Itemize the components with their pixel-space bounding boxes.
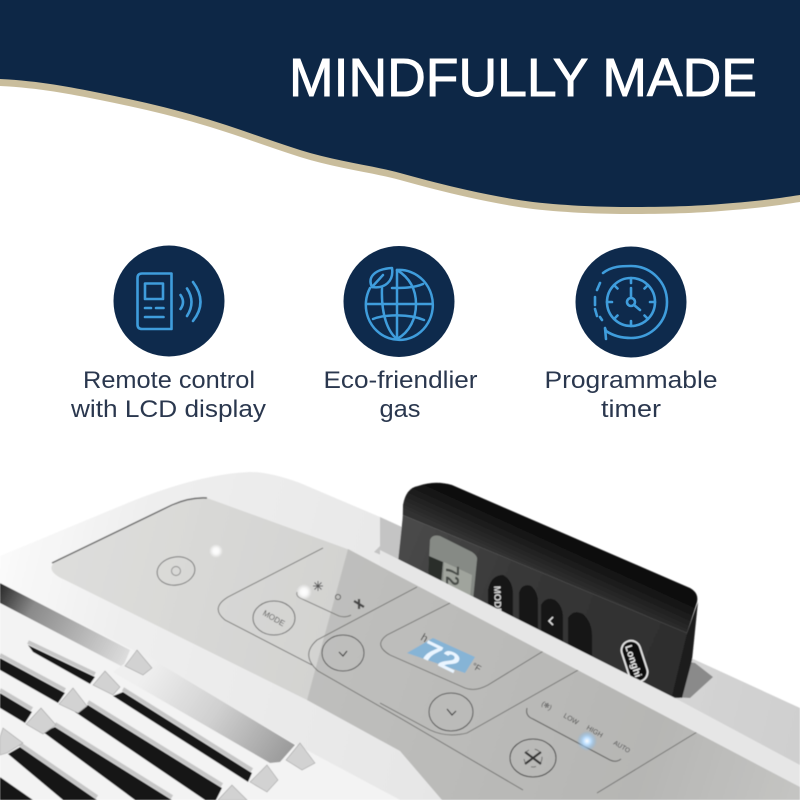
fan speed selector <box>527 700 631 761</box>
remote LCD screen: 72 <box>442 566 462 586</box>
mode selector <box>296 581 364 617</box>
power button <box>155 554 197 588</box>
label: remote control: Remote control <box>83 367 255 394</box>
feature: remote control <box>83 246 255 394</box>
air vent louvers <box>0 583 400 800</box>
temperature display: h <box>418 632 430 645</box>
product photo: air conditioner top <box>0 472 800 800</box>
brand badge <box>619 638 650 684</box>
up button <box>429 693 473 731</box>
vent ribs <box>0 650 315 800</box>
down button <box>322 635 364 671</box>
dock strip <box>380 550 800 787</box>
label: timer: timer <box>601 396 661 423</box>
temperature display: 72 <box>416 635 465 679</box>
title: MINDFULLY MADE <box>289 48 757 108</box>
glass control panel <box>51 498 800 800</box>
control outlines <box>218 548 697 793</box>
remote control in dock <box>398 483 698 698</box>
fan speed selector: HIGH <box>585 725 604 739</box>
fan speed selector: AUTO <box>612 740 631 755</box>
temperature display: °F <box>470 661 483 674</box>
remote LCD screen <box>428 536 477 600</box>
remote buttons <box>488 575 592 665</box>
fan speed selector: (✻) <box>540 700 553 712</box>
mode button <box>253 601 295 635</box>
power indicator light <box>209 544 223 558</box>
label: gas: gas <box>380 396 420 423</box>
mode button: MODE <box>261 609 286 628</box>
label: programmable: Programmable <box>544 367 718 394</box>
header banner with wave <box>0 0 800 214</box>
icon: clock with circular arrow <box>576 246 686 358</box>
fan button <box>510 739 556 777</box>
icon: globe with leaf <box>344 246 454 357</box>
icon: remote control with signal waves <box>114 246 224 356</box>
feature: programmable timer <box>544 246 718 394</box>
housing body <box>0 472 800 800</box>
remote button labels: MODE <box>491 586 503 615</box>
label: eco-friendlier: Eco-friendlier <box>324 367 478 394</box>
temperature display <box>407 632 483 679</box>
left dock recess <box>374 517 404 565</box>
side slot shadow <box>673 660 713 698</box>
label: with LCD display: with LCD display <box>70 396 266 423</box>
fan speed selector: LOW <box>562 713 580 727</box>
feature: eco-friendlier gas <box>324 246 478 394</box>
brand badge: Longhi <box>622 644 643 679</box>
